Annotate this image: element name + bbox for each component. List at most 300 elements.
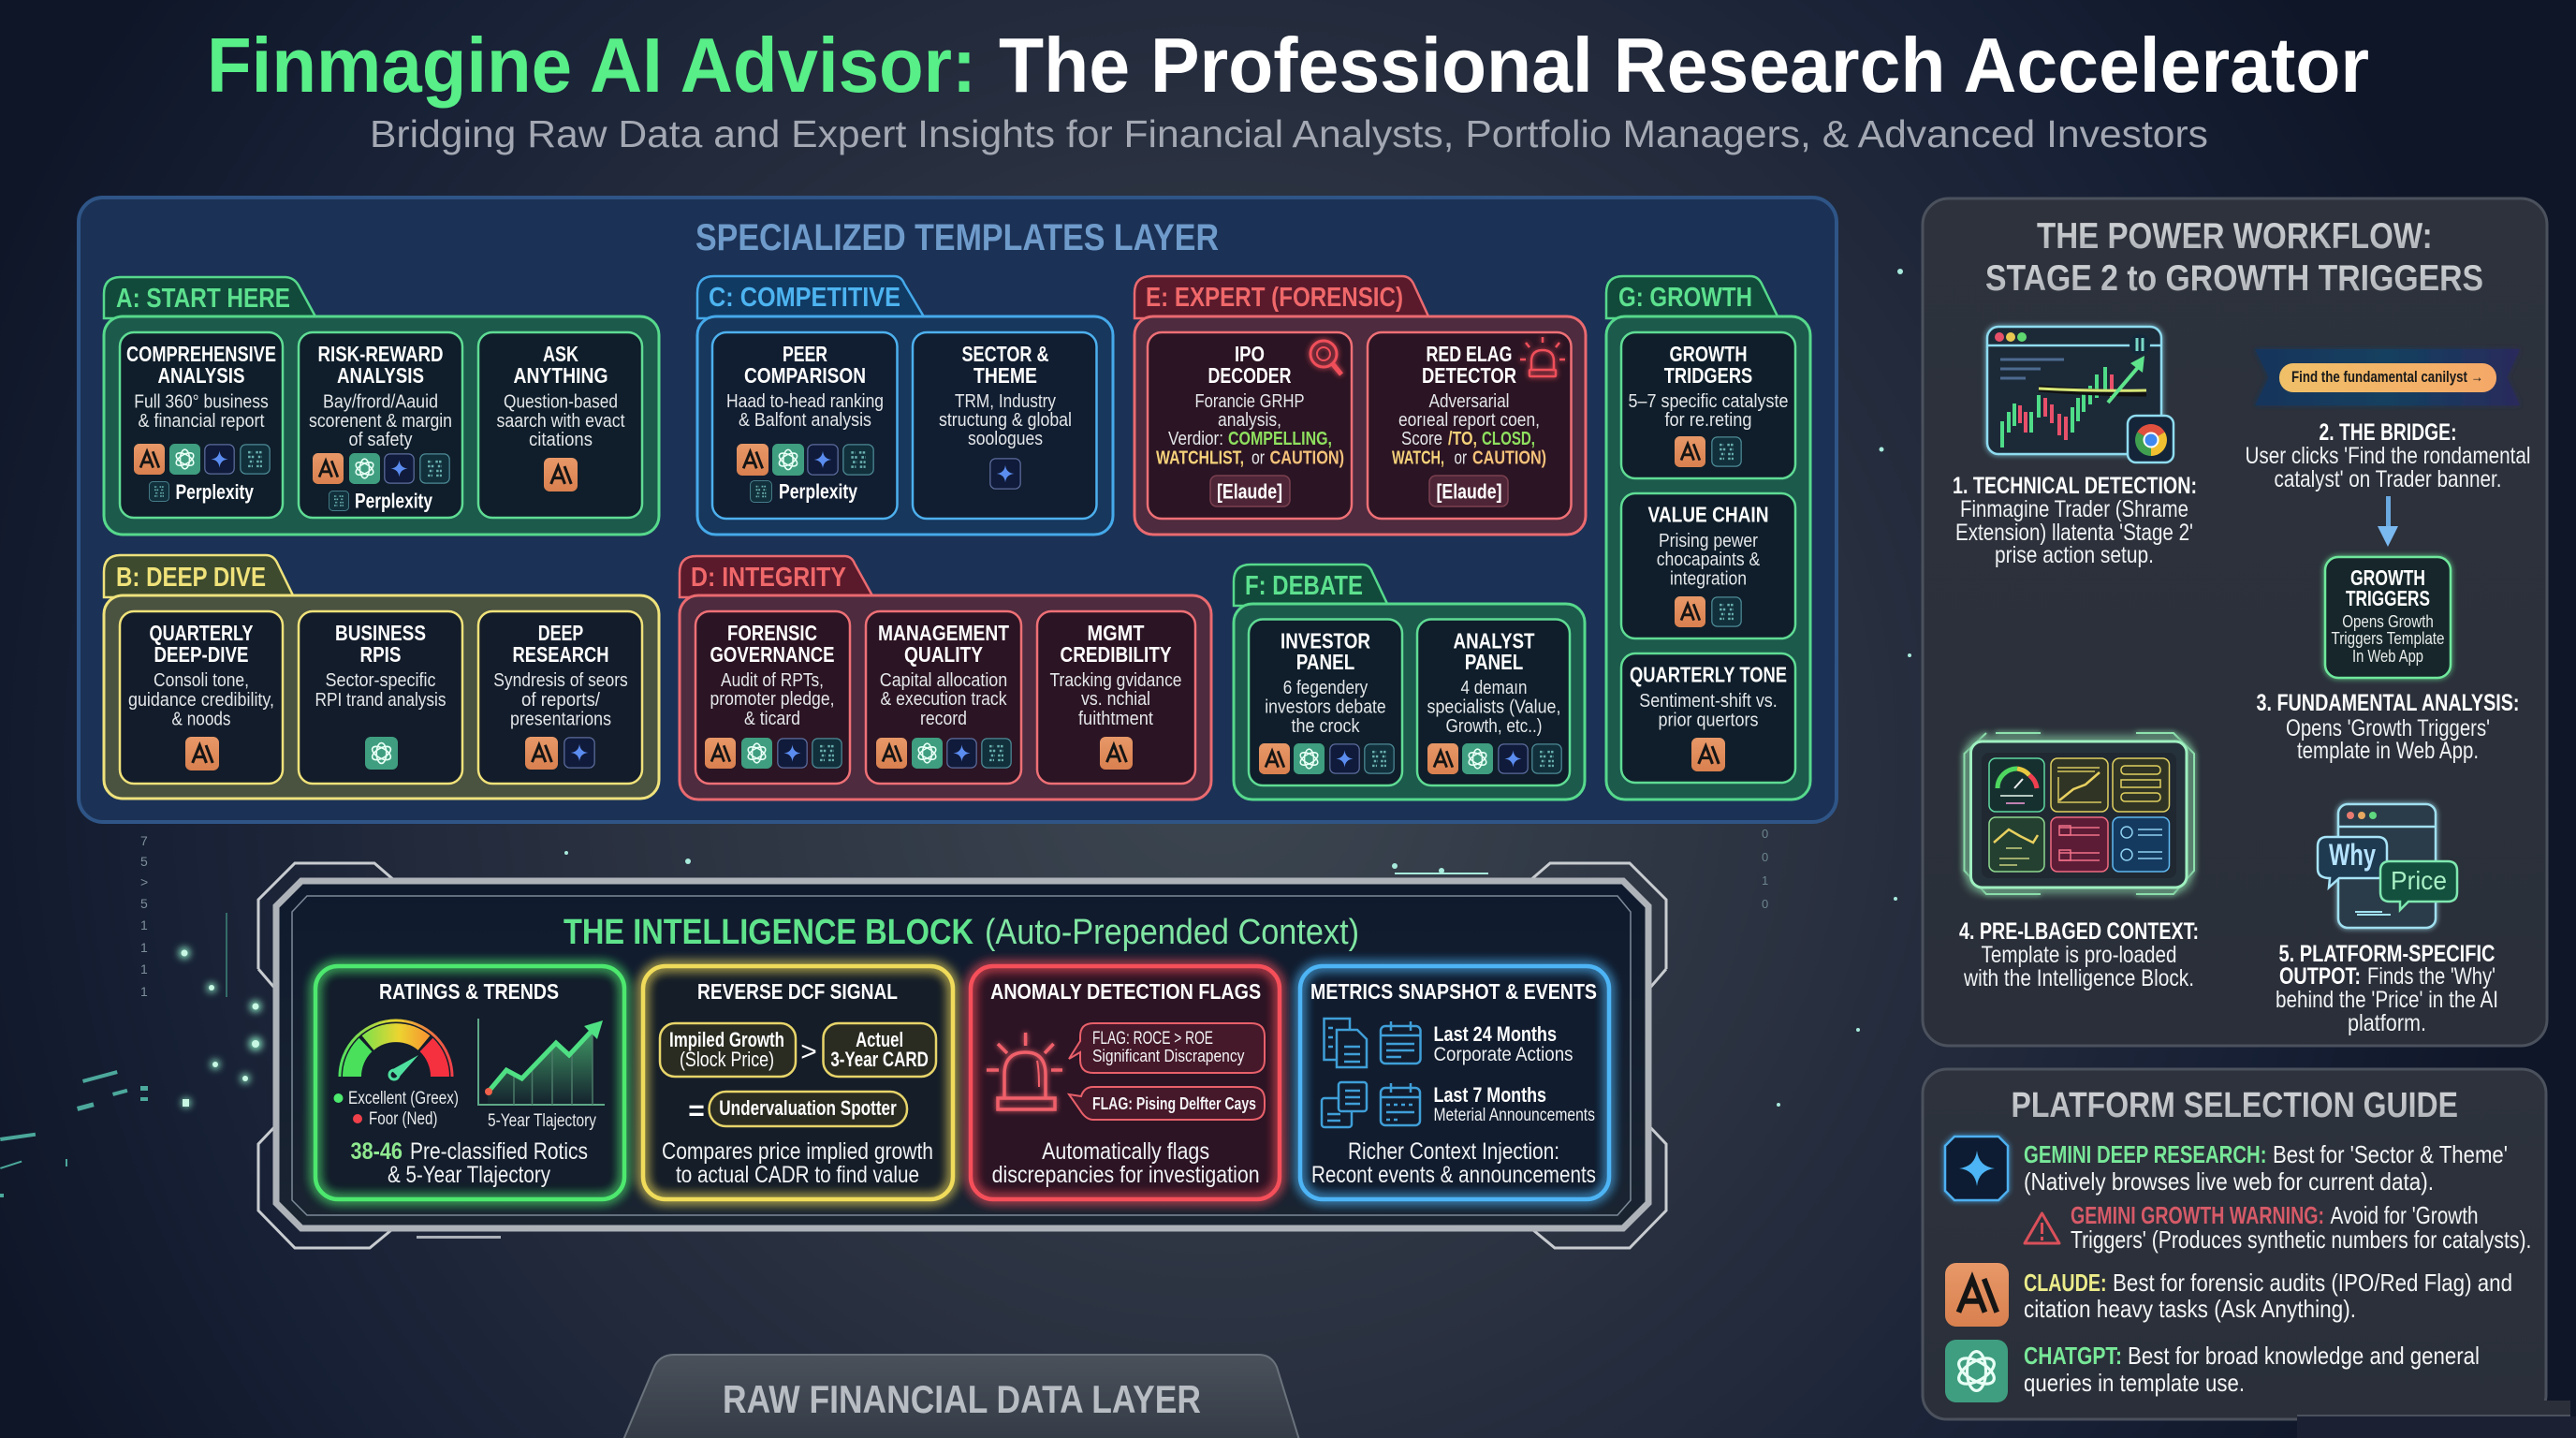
card: management quality: QUALITY [904,642,983,667]
card: peer comparison [712,332,897,519]
gemini text: (Natively browses live web for current data). [2024,1167,2434,1196]
label: last 7 months [1434,1083,1595,1125]
card: ipo decoder: or [1251,448,1265,468]
group E: expert forensic [1134,276,1586,535]
icon: why and price bubbles: Price [2391,866,2447,895]
caption: Automatically flags [1042,1138,1209,1165]
claude text [2024,1269,2512,1323]
step 3 text: template in Web App. [2297,738,2479,764]
step 2 text: 2. THE BRIDGE: [2320,419,2456,446]
card: management quality: record [920,709,967,729]
card: comprehensive analysis: ANALYSIS [157,363,245,388]
label: last 7 months: Meterial Announcements [1434,1106,1595,1125]
step 4 text: Template is pro-loaded [1981,942,2177,968]
caption: Pre-classified Rotics [410,1138,588,1165]
card: sector and theme: soologues [968,429,1043,449]
pill: implied growth: Impiled Growth [669,1028,784,1051]
heading: specialized templates layer: SPECIALIZED TEMPLATES LAYER [695,217,1219,258]
pill: undervaluation spotter [710,1092,907,1126]
background particles: left data stream: 0 [1762,850,1768,864]
icon: gemini [1945,1137,2008,1200]
group D: integrity: D: INTEGRITY [691,563,846,593]
card: quarterly deep-dive: QUARTERLY [150,621,253,645]
step 5 text: 5. PLATFORM-SPECIFIC [2278,941,2496,967]
platform icons [737,444,873,476]
flag bubble: roce: Significant Discrapency [1092,1047,1245,1065]
panel: raw financial data layer [623,1355,1299,1438]
pill: implied growth [660,1023,796,1077]
card: risk-reward analysis: scorenent & margin [309,411,452,432]
card: quarterly tone: Sentiment-shift vs. [1639,691,1778,712]
card: mgmt credibility [1037,611,1195,784]
card: red flag detector: or [1455,448,1467,468]
background particles: left data stream: 0 [1762,897,1768,911]
icon: documents [1324,1019,1367,1067]
card: ipo decoder: Verdior: [1168,429,1223,449]
card: risk-reward analysis: ANALYSIS [337,363,424,388]
greater-than sign: > [800,1036,817,1067]
step 2 text [2245,419,2531,492]
platform icons [134,444,270,475]
card: red flag detector: Score [1401,429,1442,449]
icon: claude [544,458,578,492]
step 5 text: Finds the 'Why' [2367,963,2496,990]
icon: claude [1945,1263,2009,1327]
platform pill: claude: [Elaude] [1436,479,1501,504]
arrow: bridge to growth triggers [2378,496,2398,547]
group E: expert forensic: E: EXPERT (FORENSIC) [1146,283,1403,313]
card: risk-reward analysis: of safety [348,430,412,450]
step 4 text: with the Intelligence Block. [1963,965,2194,991]
caption: discrepancies for investigation [992,1162,1260,1188]
equals sign: = [688,1095,705,1126]
caption: Recont events & announcements [1311,1162,1596,1188]
card: deep research: DEEP [538,621,583,645]
card: ask anything: ASK [543,342,578,366]
step 4: pre-loaded context [1959,733,2199,991]
icon: alarm [987,1033,1062,1109]
step 3: fundamental analysis [2256,557,2520,764]
caption [662,1138,933,1188]
card: growth triggers: TRIDGERS [1664,363,1752,388]
title: Finmagine AI Advisor: [207,22,976,109]
card: value chain: VALUE CHAIN [1647,502,1769,526]
card: management quality: MANAGEMENT [878,621,1009,645]
trajectory chart [478,1019,605,1131]
step 1 text: 1. TECHNICAL DETECTION: [1953,473,2197,499]
card: ipo decoder: Forancie GRHP [1194,391,1305,412]
step 5 text: behind the 'Price' in the AI [2276,987,2498,1013]
gemini text [2024,1140,2508,1196]
card: metrics snapshot and events [1300,966,1609,1199]
card: business kpis: RPIS [359,642,401,667]
card: ask anything: ANYTHING [513,363,608,388]
card: peer comparison: Haad to-head ranking [726,391,884,412]
card: forensic governance [695,611,850,784]
pill: actual cagr: 3-Year CARD [830,1048,929,1071]
step 1 text: prise action setup. [1995,542,2154,568]
perplexity label: Perplexity [355,489,433,513]
card: reverse dcf signal [643,966,953,1199]
group G: growth [1606,276,1810,800]
card: ipo decoder [1148,332,1352,519]
icon: claude [185,737,219,770]
row: chatgpt [1945,1340,2480,1402]
heading: intelligence block: (Auto-Prepended Context) [985,913,1359,952]
card: deep research [478,611,642,784]
card: red flag detector: DETECTOR [1422,363,1516,388]
step 1: technical detection [1953,327,2197,568]
card: management quality: & execution track [880,689,1007,710]
card: sector and theme: structung & global [939,410,1072,431]
card: ipo decoder: IPO [1235,342,1265,366]
card: growth triggers: GROWTH [1670,342,1747,366]
growth triggers mini card: Triggers Template [2331,629,2445,648]
card: red flag detector [1368,332,1571,519]
icon: calendar [1381,1021,1421,1064]
card: mgmt credibility: vs. nchial [1081,689,1150,710]
pill: actual cagr: Actuel [856,1028,903,1051]
background particles: left data stream: > [140,874,148,889]
card: ipo decoder: CAUTION) [1269,448,1344,468]
card: quarterly tone: prior quertors [1659,710,1758,730]
card: red flag detector: /TO, [1448,429,1477,449]
card: ipo decoder: analysis, [1218,410,1281,431]
card: ipo decoder: WATCHLIST, [1156,448,1244,468]
card: growth triggers [1621,332,1795,478]
card: deep research: presentarions [510,710,611,730]
card: quarterly tone [1621,653,1795,783]
card: ratings and trends: RATINGS & TRENDS [379,979,559,1004]
platform icons [1427,743,1561,774]
card: value chain: chocapaints & [1657,550,1761,570]
heading: intelligence block [564,913,1359,952]
card: deep research: of reports/ [521,690,600,711]
platform icons [1675,436,1741,467]
icon: alarm [1520,337,1565,376]
heading: platform selection guide: PLATFORM SELECTION GUIDE [2011,1086,2458,1125]
step 1 text [1953,473,2197,568]
chatgpt text: queries in template use. [2024,1369,2245,1397]
card: risk-reward analysis: Bay/frord/Aauid [323,391,438,412]
group A: start here: A: START HERE [116,284,290,314]
warning text [2071,1201,2531,1254]
gauge legend: Foor (Ned) [369,1109,438,1129]
perplexity label [751,479,858,504]
card: business kpis: RPI trand analysis [315,690,446,711]
card: anomaly detection flags [971,966,1280,1199]
card: peer comparison: & Balfont analysis [739,410,871,431]
caption: & 5-Year Tlajectory [388,1162,550,1188]
card: investor panel: 6 fegendery [1283,678,1368,698]
claude text: citation heavy tasks (Ask Anything). [2024,1295,2356,1323]
card: investor panel: the crock [1292,716,1360,737]
background particles: left data stream: 0 [1762,827,1768,841]
pill: undervaluation spotter: Undervaluation Spotter [719,1096,897,1120]
gauge legend: Excellent (Greex) [348,1089,459,1108]
platform icons [1675,596,1741,627]
panel: platform selection guide [1923,1069,2576,1438]
card: risk-reward analysis: RISK-REWARD [318,342,444,366]
warning text: Avoid for 'Growth [2331,1201,2479,1229]
step 5 text [2276,941,2498,1036]
step 2: the bridge [2245,349,2531,547]
caption: Richer Context Injection: [1348,1138,1559,1165]
row: gemini growth warning [2025,1201,2531,1254]
card: value chain: integration [1670,569,1747,590]
panel: power workflow [1923,198,2547,1046]
group A: start here [104,277,659,535]
background particles: left data stream: 1 [140,917,148,932]
gauge [340,1020,452,1079]
card: mgmt credibility: CREDIBILITY [1060,642,1172,667]
card: quarterly tone: QUARTERLY TONE [1630,663,1787,687]
card: ask anything [478,332,642,518]
card: analyst panel: specialists (Value, [1427,697,1561,717]
card: red flag detector: CAUTION) [1472,448,1546,468]
step 3 text: Opens 'Growth Triggers' [2286,715,2490,741]
group C: competitive [697,276,1113,535]
growth triggers mini card [2325,557,2451,678]
label: last 24 months [1434,1022,1573,1065]
platform icons [876,738,1011,769]
step 3 text [2256,690,2520,764]
card: business kpis: Sector-specific [326,670,436,691]
card: business kpis: BUSINESS [335,621,426,645]
card: sector and theme: TRM, Industry [955,391,1056,412]
chatgpt text: Best for broad knowledge and general [2128,1342,2480,1370]
icon: claude [1100,737,1133,770]
platform pill: claude [1429,476,1508,506]
card: investor panel [1249,620,1402,785]
platform pill: claude [1210,476,1290,506]
card: forensic governance: GOVERNANCE [710,642,835,667]
card: analyst panel: Growth, etc..) [1445,716,1543,737]
card: quarterly deep-dive: guidance credibility, [128,690,274,711]
growth triggers mini card: In Web App [2352,647,2423,666]
gauge legend [333,1089,459,1129]
card: value chain [1621,493,1795,638]
icon: warning triangle [2025,1213,2059,1243]
icon: magnifier [1310,341,1341,374]
group B: deep dive: B: DEEP DIVE [116,563,266,593]
flag bubble: roce: FLAG: ROCE > ROE [1092,1029,1213,1049]
icon: calendar grid [1381,1083,1420,1125]
caption: to actual CADR to find value [676,1162,919,1188]
background particles: left data stream: 1 [140,984,148,999]
platform pill: claude: [Elaude] [1217,479,1282,504]
card: growth triggers: 5–7 specific catalyste [1629,391,1788,412]
perplexity label [150,480,255,504]
step 1 text: Extension) llatenta 'Stage 2' [1955,520,2193,546]
step 4 text: 4. PRE-LBAGED CONTEXT: [1959,918,2199,945]
group G: growth: G: GROWTH [1618,283,1752,313]
card: investor panel: INVESTOR [1281,629,1370,653]
card: ipo decoder: DECODER [1208,363,1292,388]
caption [350,1138,588,1188]
perplexity label: Perplexity [176,480,255,504]
card: value chain: Prising pewer [1659,531,1758,551]
icon: gemini [990,459,1020,489]
card: peer comparison: PEER [783,342,827,366]
card: risk-reward analysis [299,332,462,518]
chatgpt text: CHATGPT: [2024,1342,2122,1370]
icon: browser with chart [1987,327,2174,462]
card: management quality: Capital allocation [880,670,1007,691]
platform icons [313,453,449,484]
card: ask anything: citations [529,430,593,450]
card: management quality [866,611,1021,784]
card: forensic governance: FORENSIC [727,621,817,645]
growth triggers mini card: GROWTH [2350,565,2425,590]
card: analyst panel [1417,620,1570,785]
pill: implied growth: (Slock Price) [680,1048,774,1071]
card: peer comparison: COMPARISON [744,363,866,388]
card: red flag detector: RED ELAG [1427,342,1513,366]
card: ask anything: Question-based [504,391,618,412]
background particles: left data stream [0,269,1911,1239]
card: analyst panel: ANALYST [1453,629,1535,653]
step 1 text: Finmagine Trader (Shrame [1960,496,2188,522]
card: sector and theme: THEME [973,363,1037,388]
icon: chatgpt [1945,1340,2008,1402]
caption [992,1138,1260,1188]
frame brackets [258,863,1666,1248]
background particles: left data stream: 5 [140,896,148,911]
card: red flag detector: eorıeal report coen, [1398,410,1540,431]
platform icons [525,737,594,770]
card: deep research: Syndresis of seors [493,670,628,691]
heading: power workflow: STAGE 2 to GROWTH TRIGGERS [1985,258,2483,299]
group C: competitive: C: COMPETITIVE [709,283,900,313]
pill: actual cagr [824,1023,936,1077]
step 2 text: catalyst' on Trader banner. [2275,466,2501,492]
perplexity label: Perplexity [779,479,858,504]
card: deep research: RESEARCH [513,642,608,667]
group B: deep dive [104,555,659,799]
label: last 24 months: Corporate Actions [1434,1044,1573,1065]
warning text: GEMINI GROWTH WARNING: [2071,1201,2324,1229]
card: comprehensive analysis [120,332,283,518]
heading: intelligence block: THE INTELLIGENCE BLOCK [564,913,973,952]
panel: intelligence block [258,863,1666,1248]
icon: chatgpt [365,737,398,770]
card: reverse dcf signal: REVERSE DCF SIGNAL [697,979,898,1004]
card: red flag detector: WATCH, [1392,448,1444,468]
panel: raw financial data layer: RAW FINANCIAL DATA LAYER [723,1377,1201,1421]
card: business kpis [299,611,462,784]
icon: why and price bubbles [2318,804,2457,928]
heading: power workflow [1985,216,2483,299]
label: last 7 months: Last 7 Months [1434,1083,1546,1107]
group D: integrity [680,556,1211,800]
row: claude [1945,1263,2512,1327]
flag bubble: roce [1069,1023,1265,1073]
card: investor panel: investors debate [1265,697,1386,717]
background particles: left data stream: 1 [140,940,148,955]
growth triggers mini card: Opens Growth [2342,612,2434,631]
title [207,22,2369,109]
card: investor panel: PANEL [1296,650,1354,674]
card: sector and theme [913,332,1097,519]
card: comprehensive analysis: Full 360° business [134,391,269,412]
platform icons [705,738,842,769]
card: forensic governance: promoter pledge, [710,689,835,710]
trajectory chart: 5-Year Tlajectory [488,1111,596,1131]
card: quarterly deep-dive: & noods [172,710,230,730]
flag bubble: debtor days [1069,1087,1265,1120]
card: ipo decoder: COMPELLING, [1228,429,1332,449]
icon: notes [1322,1082,1367,1127]
background particles: left data stream: 1 [1762,873,1768,888]
icon: dashboard [1964,733,2194,894]
icon: claude [1691,738,1725,771]
card: quarterly deep-dive: DEEP-DIVE [154,642,249,667]
step 4 text [1959,918,2199,991]
card: ratings and trends [315,966,624,1199]
background particles: left data stream: 5 [140,854,148,869]
card: anomaly detection flags: ANOMALY DETECTION FLAGS [990,979,1261,1004]
icon: why and price bubbles: Why [2329,838,2376,872]
card: comprehensive analysis: COMPREHENSIVE [126,342,276,366]
growth triggers mini card: TRIGGERS [2346,586,2430,610]
group F: debate [1234,565,1585,800]
card: sector and theme: SECTOR & [962,342,1048,366]
card: metrics snapshot and events: METRICS SNAPSHOT & EVENTS [1310,979,1597,1004]
caption: 38-46 [350,1138,402,1165]
caption [1311,1138,1596,1188]
panel: specialized templates layer [79,198,1837,822]
background particles: left data stream: 1 [140,961,148,976]
card: quarterly deep-dive [120,611,283,784]
chatgpt text [2024,1342,2480,1397]
heading: power workflow: THE POWER WORKFLOW: [2037,216,2433,257]
card: mgmt credibility: MGMT [1088,621,1144,645]
card: mgmt credibility: fuithtment [1078,709,1153,729]
platform icons [1259,743,1394,774]
row: gemini deep research [1945,1137,2508,1200]
perplexity label [329,489,433,513]
label: last 24 months: Last 24 Months [1434,1022,1557,1046]
card: forensic governance: & ticard [744,709,800,729]
card: analyst panel: 4 demaın [1460,678,1528,698]
card: comprehensive analysis: & financial report [139,411,265,432]
caption: Compares price implied growth [662,1138,933,1165]
claude text: Best for forensic audits (IPO/Red Flag) and [2113,1269,2512,1297]
flag bubble: debtor days: FLAG: Pising Delfter Cays [1092,1094,1256,1113]
subtitle: Bridging Raw Data and Expert Insights for Financial Analysts, Portfolio Managers, & Advanced Investors [370,112,2208,155]
title: The Professional Research Accelerator [999,22,2369,109]
card: ask anything: saarch with evact [496,411,625,432]
card: quarterly deep-dive: Consoli tone, [154,670,249,691]
banner with button [2255,349,2520,405]
card: red flag detector: Adversarial [1428,391,1509,412]
step 5: platform-specific output [2276,804,2498,1036]
step 5 text: OUTPOT: [2279,963,2361,990]
group F: debate: F: DEBATE [1245,571,1363,601]
gemini text: GEMINI DEEP RESEARCH: [2024,1140,2267,1168]
card: mgmt credibility: Tracking gvidance [1050,670,1181,691]
background particles: left data stream: 7 [140,833,148,848]
gemini text: Best for 'Sector & Theme' [2273,1140,2508,1168]
banner with button: Find the fundamental canilyst → [2291,368,2483,386]
card: red flag detector: CLOSD, [1482,429,1535,449]
claude text: CLAUDE: [2024,1269,2106,1297]
card: forensic governance: Audit of RPTs, [721,670,824,691]
card: analyst panel: PANEL [1465,650,1523,674]
step 5 text: platform. [2348,1010,2426,1036]
card: growth triggers: for re.reting [1664,410,1752,431]
